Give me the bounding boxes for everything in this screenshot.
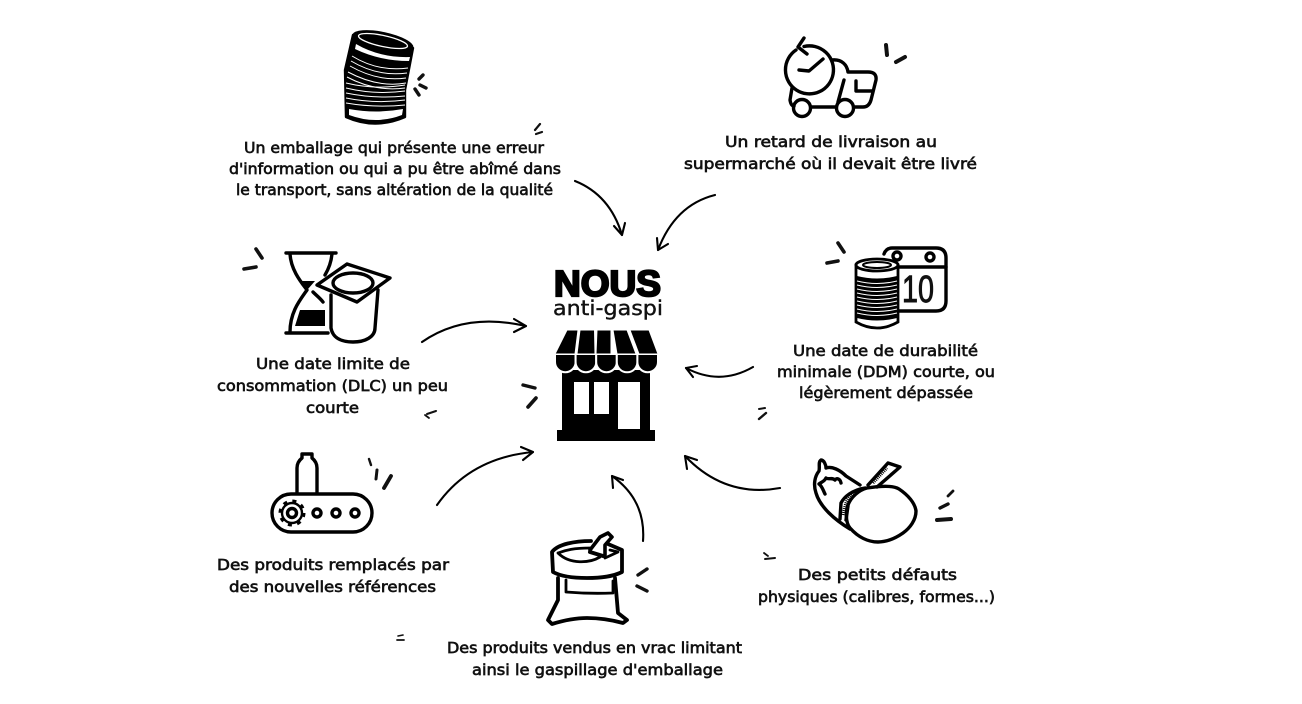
panel: damaged packaging — [229, 26, 561, 199]
text: late delivery — [684, 133, 977, 173]
arrow: packaging to shop — [575, 181, 625, 235]
text: best-before date: Une date de durabilité — [793, 342, 978, 360]
arrow: DLC to shop — [422, 319, 526, 342]
icon: shop — [555, 330, 658, 441]
icon: can and calendar — [856, 248, 946, 328]
panel: physical defects — [758, 460, 995, 606]
text: late delivery: supermarché où il devait être livré — [684, 155, 977, 173]
accent marks — [937, 491, 953, 520]
subtitle: anti-gaspi: anti-gaspi — [553, 296, 663, 320]
text: best-before date: minimale (DDM) courte, ou — [777, 363, 995, 381]
text: damaged packaging: le transport, sans altération de la qualité — [236, 181, 553, 199]
title: NOUS: NOUS — [554, 263, 661, 304]
text: replaced products: des nouvelles références — [229, 578, 436, 596]
accent marks — [886, 45, 905, 62]
icon: can and calendar: 10 — [902, 269, 934, 311]
text: bulk products: Des produits vendus en vrac limitant — [447, 639, 742, 657]
text: short use-by date: courte — [306, 399, 359, 417]
text: replaced products: Des produits remplacés par — [217, 556, 450, 574]
accent marks near text — [535, 124, 542, 134]
icon: truck with clock — [785, 38, 876, 116]
text: best-before date: légèrement dépassée — [799, 384, 973, 402]
icon: hourglass and yogurt — [286, 253, 390, 342]
text: short use-by date: Une date limite de — [256, 355, 410, 373]
accent marks — [637, 569, 647, 591]
panel: bulk products — [447, 533, 742, 679]
text: short use-by date: consommation (DLC) un peu — [217, 377, 448, 395]
icon: conveyor with bottle — [272, 454, 372, 532]
text: late delivery: Un retard de livraison au — [725, 133, 937, 151]
arrow: defects to shop — [685, 456, 780, 490]
text: damaged packaging: Un emballage qui présente une erreur — [244, 139, 545, 157]
text: physical defects — [758, 566, 995, 606]
decorative accent marks — [397, 385, 775, 640]
arrow: replaced products to shop — [437, 447, 533, 505]
central logo: Nous anti-gaspi shop — [553, 263, 663, 441]
panel: short use-by date — [217, 249, 448, 417]
icon: aubergine with tape measure — [815, 460, 916, 542]
accent marks — [369, 459, 391, 488]
text: short use-by date — [217, 355, 448, 417]
text: bulk products: ainsi le gaspillage d'emballage — [472, 661, 723, 679]
accent marks — [244, 249, 262, 269]
accent marks — [415, 75, 426, 95]
text: bulk products — [447, 639, 742, 679]
text: replaced products — [217, 556, 450, 596]
panel: best-before date — [777, 243, 995, 402]
panel: late delivery — [684, 38, 977, 173]
text: physical defects: Des petits défauts — [798, 566, 957, 584]
arrow: delivery to shop — [657, 195, 715, 250]
icon: sack with scoop — [548, 533, 627, 624]
text: best-before date — [777, 342, 995, 402]
icon: crushed can — [345, 26, 426, 123]
panel: replaced products — [217, 454, 450, 596]
text: damaged packaging: d'information ou qui a pu être abîmé dans — [229, 160, 561, 178]
arrow: DDM to shop — [686, 366, 753, 377]
arrow: bulk to shop — [612, 476, 643, 541]
text: damaged packaging — [229, 139, 561, 199]
text: physical defects: physiques (calibres, formes...) — [758, 588, 995, 606]
accent marks — [827, 243, 844, 263]
